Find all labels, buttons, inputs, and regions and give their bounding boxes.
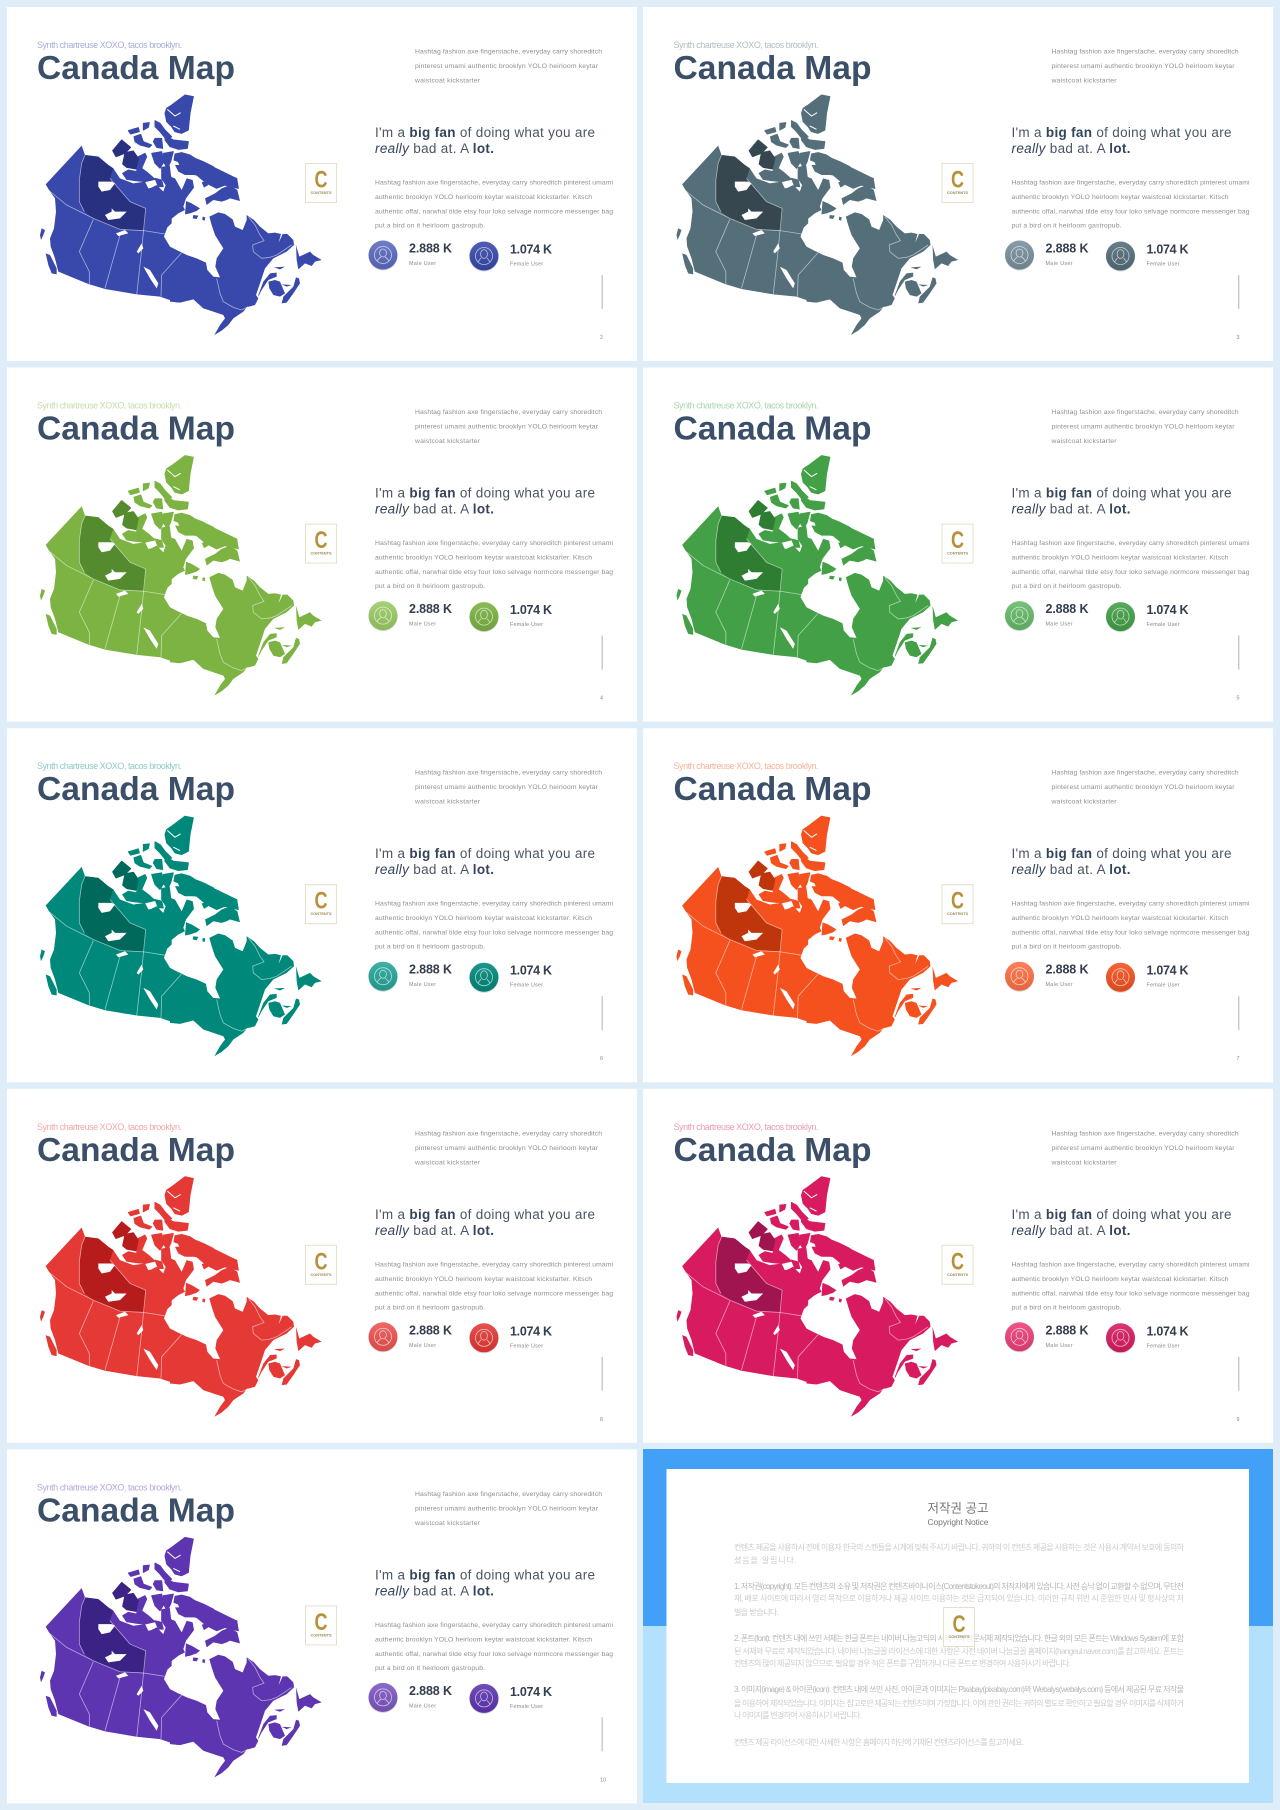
logo: CONTENTS (310, 191, 332, 195)
page number: 3 (1236, 335, 1240, 341)
panel: lime slide (7, 368, 637, 722)
icon: female user (1106, 963, 1135, 993)
page number: 10 (600, 1777, 606, 1783)
panel: pink slide (643, 1089, 1273, 1443)
body paragraph: Hashtag fashion axe fingerstache, everyday carry shoreditch pinterest umami (375, 901, 613, 908)
icon: male user (1005, 601, 1034, 631)
top paragraph: pinterest umami authentic brooklyn YOLO heirloom keytar (415, 424, 599, 431)
page number: 5 (1236, 696, 1240, 702)
heading (1012, 1207, 1232, 1238)
body paragraph: authentic brooklyn YOLO heirloom keytar waistcoat kickstarter. Kitsch (375, 555, 592, 562)
subtitle: Synth chartreuse XOXO, tacos brooklyn. (37, 401, 182, 411)
heading: really bad at. A lot. (375, 1223, 494, 1238)
notice body: 컨텐츠 제공을 사용하시 전에 이용자 한국의 스캔들을 시계에 맞춰 주시기 바랍니다. 귀하의 이 컨텐츠 제공을 사용하는 것은 사용시 계약서 보호에 동의하 (734, 1542, 1185, 1552)
body paragraph (375, 540, 613, 590)
heading: I'm a big fan of doing what you are (1012, 125, 1232, 140)
heading: really bad at. A lot. (1012, 1223, 1130, 1238)
body paragraph: put a bird on it heirloom gastropub. (375, 1665, 485, 1672)
stat: female users: 1.074 K (1146, 964, 1188, 978)
stat: female users (510, 1324, 552, 1349)
heading: really bad at. A lot. (375, 862, 494, 877)
logo: CONTENTS (947, 1273, 968, 1277)
stat: male users: Male User (1046, 1343, 1073, 1349)
top paragraph: waistcoat kickstarter (414, 1159, 481, 1166)
title: Canada Map (37, 1132, 235, 1169)
body paragraph: Hashtag fashion axe fingerstache, everyday carry shoreditch pinterest umami (1012, 1261, 1250, 1268)
notice body: 3. 이미지(image) & 아이콘(icon): 컨텐츠 내에 쓰인 사진, 아이콘과 이미지는 Pixabay(pixabay.com)와 Webalys(webalys.com) 등에서 제공된 무료 저작물 (734, 1684, 1184, 1694)
top paragraph: waistcoat kickstarter (414, 438, 481, 445)
body paragraph: put a bird on it heirloom gastropub. (1012, 1304, 1122, 1311)
top paragraph: Hashtag fashion axe fingerstache, everyday carry shoreditch (1052, 48, 1239, 56)
body paragraph: authentic offal, narwhal tilde etsy four loko selvage normcore messenger bag (375, 930, 613, 937)
subtitle: Synth chartreuse XOXO, tacos brooklyn. (37, 40, 182, 50)
logo (944, 1608, 974, 1646)
heading: I'm a big fan of doing what you are (1012, 486, 1232, 501)
subtitle: Synth chartreuse XOXO, tacos brooklyn. (674, 1122, 818, 1132)
body paragraph: authentic brooklyn YOLO heirloom keytar waistcoat kickstarter. Kitsch (375, 1276, 592, 1283)
body paragraph: Hashtag fashion axe fingerstache, everyday carry shoreditch pinterest umami (375, 1261, 613, 1268)
stat: male users: Male User (409, 622, 436, 628)
title: Canada Map (37, 771, 235, 808)
stat: male users: Male User (409, 261, 436, 267)
logo: C (314, 888, 328, 915)
stat: female users: Female User (1146, 262, 1180, 268)
vertical rule (602, 636, 603, 670)
stat: female users (510, 242, 552, 268)
body paragraph: put a bird on it heirloom gastropub. (375, 583, 485, 590)
logo (942, 885, 973, 924)
notice body: 벌을 받습니다. (734, 1607, 779, 1617)
vertical rule (602, 1357, 603, 1391)
stat: male users (1046, 1323, 1088, 1349)
body paragraph: Hashtag fashion axe fingerstache, everyday carry shoreditch pinterest umami (375, 1622, 613, 1629)
top paragraph: pinterest umami authentic brooklyn YOLO heirloom keytar (1052, 63, 1235, 70)
icon: female user (1106, 242, 1135, 272)
stat: female users: 1.074 K (510, 964, 552, 978)
icon: male user (1005, 962, 1034, 992)
subtitle: Synth chartreuse XOXO, tacos brooklyn. (674, 401, 818, 411)
stat: female users: 1.074 K (510, 1685, 552, 1699)
top paragraph: Hashtag fashion axe fingerstache, everyday carry shoreditch (415, 770, 602, 777)
heading: I'm a big fan of doing what you are (375, 1567, 595, 1582)
title: Canada Map (37, 1492, 235, 1529)
notice body: 나 이미지를 변경하여 사용하시기 바랍니다. (734, 1710, 862, 1720)
stat: female users (1146, 603, 1188, 628)
stat: female users: Female User (510, 262, 543, 268)
body paragraph: Hashtag fashion axe fingerstache, everyday carry shoreditch pinterest umami (375, 540, 613, 547)
map of Canada (40, 816, 322, 1056)
stat: male users (409, 963, 452, 988)
stat: female users: Female User (510, 1343, 543, 1349)
top paragraph (1050, 770, 1239, 806)
top paragraph: Hashtag fashion axe fingerstache, everyday carry shoreditch (415, 1491, 602, 1498)
stat: male users: 2.888 K (409, 963, 452, 977)
stat: female users: 1.074 K (510, 242, 552, 256)
top paragraph: Hashtag fashion axe fingerstache, everyday carry shoreditch (415, 1130, 602, 1137)
heading (1012, 486, 1232, 517)
panel: green slide (643, 368, 1273, 722)
logo (942, 524, 973, 563)
heading: I'm a big fan of doing what you are (375, 125, 595, 140)
notice body: 셨음을 알립니다. (734, 1555, 797, 1565)
stat: male users: Male User (1046, 982, 1073, 988)
heading (375, 1567, 595, 1598)
logo: C (951, 527, 964, 554)
stat: male users: 2.888 K (409, 242, 452, 256)
stat: male users (409, 1323, 452, 1349)
logo: C (951, 888, 964, 915)
stat: male users: 2.888 K (1046, 242, 1088, 256)
heading (1012, 125, 1232, 156)
body paragraph: put a bird on it heirloom gastropub. (375, 1304, 485, 1311)
panel: orange slide (643, 728, 1273, 1082)
body paragraph: authentic offal, narwhal tilde etsy four loko selvage normcore messenger bag (375, 1651, 613, 1658)
logo: C (314, 166, 328, 194)
body paragraph: Hashtag fashion axe fingerstache, everyday carry shoreditch pinterest umami (1012, 540, 1250, 547)
page number: 6 (600, 1056, 603, 1062)
top paragraph (1050, 409, 1239, 445)
panel: red slide (7, 1089, 637, 1443)
logo (306, 1245, 336, 1284)
stat: male users (409, 1684, 452, 1709)
icon: female user (470, 1323, 498, 1353)
vertical rule (1238, 636, 1239, 670)
top paragraph: Hashtag fashion axe fingerstache, everyday carry shoreditch (1052, 770, 1239, 777)
icon: female user (1106, 602, 1135, 632)
top paragraph: pinterest umami authentic brooklyn YOLO heirloom keytar (1052, 1145, 1235, 1152)
logo: C (314, 1248, 328, 1275)
map of Canada (40, 456, 322, 696)
logo: C (951, 166, 964, 194)
vertical rule (602, 996, 603, 1030)
vertical rule (1238, 1357, 1239, 1391)
logo (942, 164, 973, 202)
body paragraph: authentic brooklyn YOLO heirloom keytar waistcoat kickstarter. Kitsch (375, 1636, 592, 1643)
stat: male users: 2.888 K (1046, 602, 1088, 616)
stat: male users: 2.888 K (409, 1323, 452, 1337)
subtitle: Synth chartreuse XOXO, tacos brooklyn. (674, 761, 818, 771)
logo: C (952, 1611, 966, 1638)
top paragraph: pinterest umami authentic brooklyn YOLO heirloom keytar (415, 1505, 599, 1512)
top paragraph (414, 48, 602, 84)
stat: male users: 2.888 K (409, 602, 452, 616)
stat: male users: Male User (409, 982, 436, 988)
notice body (734, 1542, 1185, 1747)
body paragraph (375, 1261, 613, 1311)
top paragraph: Hashtag fashion axe fingerstache, everyday carry shoreditch (415, 409, 602, 416)
body paragraph (375, 1622, 613, 1672)
heading (375, 125, 595, 156)
heading: I'm a big fan of doing what you are (1012, 846, 1232, 861)
stat: female users (1146, 964, 1188, 989)
heading: I'm a big fan of doing what you are (375, 486, 595, 501)
notice body: 재, 배포 사이트에 따라서 영리 목적으로 이용하거나 제공 사이트 이용하는 것은 금지되어 있습니다. 이러한 규칙 위반 시 준엄한 민사 및 형사상의 처 (734, 1593, 1184, 1603)
notice body: 된 서체와 무료로 제작되었습니다. 네이버 나눔글꼴 라이선스에 대한 사항은 사전 네이버 나눔글꼴 홈페이지(hangeul.naver.com)를 참고하세요. 폰트는 (734, 1646, 1184, 1656)
vertical rule (1238, 996, 1239, 1030)
logo: CONTENTS (948, 1635, 970, 1639)
icon: male user (368, 962, 398, 992)
panel: copyright notice (643, 1449, 1273, 1803)
top paragraph (414, 1491, 602, 1527)
body paragraph: authentic offal, narwhal tilde etsy four loko selvage normcore messenger bag (375, 208, 613, 216)
stat: male users (1046, 602, 1088, 628)
top paragraph: waistcoat kickstarter (1050, 799, 1117, 806)
stat: female users: 1.074 K (510, 603, 552, 617)
body paragraph (1012, 1261, 1250, 1311)
body paragraph: put a bird on it heirloom gastropub. (1012, 222, 1122, 230)
panel: indigo slide (7, 7, 637, 361)
heading: really bad at. A lot. (1012, 502, 1130, 517)
logo: C (314, 1609, 328, 1636)
stat: female users (1146, 1324, 1188, 1349)
heading: I'm a big fan of doing what you are (375, 846, 595, 861)
top paragraph: pinterest umami authentic brooklyn YOLO heirloom keytar (415, 1145, 599, 1152)
heading (375, 486, 595, 517)
panel: teal slide (7, 728, 637, 1082)
icon: female user (1106, 1323, 1135, 1353)
body paragraph (1012, 540, 1250, 590)
body paragraph: put a bird on it heirloom gastropub. (375, 222, 485, 230)
subtitle: Synth chartreuse XOXO, tacos brooklyn. (37, 761, 182, 771)
icon: male user (368, 1322, 398, 1352)
map of Canada (676, 1177, 958, 1417)
subtitle: Synth chartreuse XOXO, tacos brooklyn. (37, 1122, 182, 1132)
logo: C (314, 527, 328, 554)
stat: male users: Male User (1046, 261, 1073, 267)
map of Canada (40, 1537, 322, 1777)
top paragraph (414, 770, 602, 806)
logo: CONTENTS (310, 1633, 332, 1637)
icon: female user (470, 1684, 498, 1714)
body paragraph: Hashtag fashion axe fingerstache, everyday carry shoreditch pinterest umami (375, 180, 613, 186)
stat: male users (1046, 963, 1088, 988)
body paragraph (375, 180, 613, 230)
stat: male users: 2.888 K (409, 1684, 452, 1698)
top paragraph: waistcoat kickstarter (414, 1520, 481, 1527)
subtitle: Synth chartreuse XOXO, tacos brooklyn. (674, 40, 818, 50)
body paragraph: authentic brooklyn YOLO heirloom keytar waistcoat kickstarter. Kitsch (1012, 555, 1229, 562)
title: Canada Map (674, 771, 872, 808)
top paragraph (1050, 1130, 1239, 1166)
title: Canada Map (674, 50, 872, 87)
top paragraph: Hashtag fashion axe fingerstache, everyday carry shoreditch (1052, 1130, 1239, 1137)
subtitle: Synth chartreuse XOXO, tacos brooklyn. (37, 1482, 182, 1492)
heading (375, 1207, 595, 1238)
notice body: 2. 폰트(font): 컨텐츠 내에 쓰인 서체는 한글 폰트는 네이버 나눔고딕의 서체이며 영문서체 제작되었습니다. 한글 외의 모든 폰트는 Windows System에 포함 (734, 1633, 1185, 1643)
stat: male users: Male User (409, 1703, 436, 1709)
logo (306, 164, 336, 202)
stat: female users: 1.074 K (510, 1324, 552, 1338)
top paragraph: waistcoat kickstarter (1050, 1159, 1117, 1166)
top paragraph: pinterest umami authentic brooklyn YOLO heirloom keytar (1052, 424, 1235, 431)
stat: female users (510, 603, 552, 628)
top paragraph: Hashtag fashion axe fingerstache, everyday carry shoreditch (1052, 409, 1239, 416)
logo: CONTENTS (947, 552, 968, 556)
heading: I'm a big fan of doing what you are (375, 1207, 595, 1222)
stat: male users: Male User (1046, 622, 1073, 628)
body paragraph: put a bird on it heirloom gastropub. (1012, 944, 1122, 951)
title: Canada Map (37, 50, 235, 87)
top paragraph (414, 1130, 602, 1166)
top paragraph (414, 409, 602, 445)
top paragraph: Hashtag fashion axe fingerstache, everyday carry shoreditch (415, 48, 602, 56)
body paragraph: authentic offal, narwhal tilde etsy four loko selvage normcore messenger bag (1012, 569, 1250, 576)
icon: male user (1005, 240, 1034, 270)
body paragraph: Hashtag fashion axe fingerstache, everyday carry shoreditch pinterest umami (1012, 901, 1250, 908)
map of Canada (40, 95, 322, 335)
map of Canada (676, 95, 958, 335)
body paragraph: put a bird on it heirloom gastropub. (375, 944, 485, 951)
stat: female users: 1.074 K (1146, 1324, 1188, 1338)
title: Canada Map (674, 1132, 872, 1169)
top paragraph (1050, 48, 1239, 84)
stat: female users: Female User (1146, 622, 1180, 628)
stat: female users: 1.074 K (1146, 603, 1188, 617)
stat: male users (409, 242, 452, 267)
body paragraph: Hashtag fashion axe fingerstache, everyday carry shoreditch pinterest umami (1012, 180, 1250, 186)
notice title: Copyright Notice (928, 1517, 989, 1527)
body paragraph (1012, 901, 1250, 951)
stat: female users: Female User (510, 983, 543, 989)
page number: 8 (600, 1417, 603, 1423)
body paragraph: authentic offal, narwhal tilde etsy four loko selvage normcore messenger bag (375, 569, 613, 576)
body paragraph: authentic offal, narwhal tilde etsy four loko selvage normcore messenger bag (375, 1290, 613, 1297)
top paragraph: pinterest umami authentic brooklyn YOLO heirloom keytar (415, 63, 599, 70)
map of Canada (40, 1177, 322, 1417)
body paragraph: authentic brooklyn YOLO heirloom keytar waistcoat kickstarter. Kitsch (1012, 194, 1229, 201)
vertical rule (602, 275, 603, 309)
icon: male user (368, 240, 398, 270)
logo: CONTENTS (310, 1273, 332, 1277)
heading (375, 846, 595, 877)
logo: C (951, 1248, 964, 1275)
top paragraph: pinterest umami authentic brooklyn YOLO heirloom keytar (415, 784, 599, 791)
stat: female users: Female User (1146, 983, 1180, 989)
notice body: 컨텐츠 제공 라이선스에 대한 사세한 사항은 홈페이지 하단에 기재된 컨텐츠라이선스를 참고하세요. (734, 1737, 1024, 1747)
title: Canada Map (674, 411, 872, 448)
body paragraph (375, 901, 613, 951)
heading: really bad at. A lot. (1012, 141, 1130, 156)
icon: female user (470, 242, 498, 272)
stat: male users: 2.888 K (1046, 963, 1088, 977)
body paragraph (1012, 180, 1250, 230)
top paragraph: waistcoat kickstarter (414, 799, 481, 806)
page number: 7 (1236, 1056, 1240, 1062)
body paragraph: authentic brooklyn YOLO heirloom keytar waistcoat kickstarter. Kitsch (1012, 1276, 1229, 1283)
notice body: 을 이용하여 제작되었습니다. 이미지는 참고로만 제공되는 컨텐츠이며 가정합니다. 이에 관한 권리는 귀하의 별도로 확인하고 필요할 경우 이미지를 삭제하거 (734, 1698, 1184, 1708)
panel: purple slide (7, 1449, 637, 1803)
stat: female users: Female User (510, 1704, 543, 1710)
stat: female users (510, 964, 552, 989)
stat: female users (1146, 242, 1188, 268)
logo: CONTENTS (947, 191, 968, 195)
icon: male user (368, 601, 398, 631)
map of Canada (676, 816, 958, 1056)
heading (1012, 846, 1232, 877)
vertical rule (1238, 275, 1239, 309)
stat: female users: Female User (510, 622, 543, 628)
body paragraph: authentic offal, narwhal tilde etsy four loko selvage normcore messenger bag (1012, 930, 1250, 937)
page number: 2 (600, 335, 603, 341)
icon: female user (470, 602, 498, 632)
heading: I'm a big fan of doing what you are (1012, 1207, 1232, 1222)
stat: male users: 2.888 K (1046, 1323, 1088, 1337)
logo: CONTENTS (947, 912, 968, 916)
logo (306, 524, 336, 563)
body paragraph: authentic brooklyn YOLO heirloom keytar waistcoat kickstarter. Kitsch (1012, 915, 1229, 922)
logo: CONTENTS (310, 912, 332, 916)
logo: CONTENTS (310, 552, 332, 556)
notice body: 1. 저작권(copyright): 모든 컨텐츠의 소유 및 저작권은 컨텐츠바이나이스(Contentstokeout)의 저작자에게 있습니다. 사전 승낙 없이 교환할 수 없으며, 무단전 (734, 1581, 1184, 1591)
stat: male users (1046, 242, 1088, 267)
top paragraph: waistcoat kickstarter (414, 78, 481, 84)
top paragraph: waistcoat kickstarter (1050, 438, 1117, 445)
heading: really bad at. A lot. (375, 1583, 494, 1598)
logo (306, 885, 336, 924)
vertical rule (602, 1717, 603, 1751)
page number: 9 (1236, 1417, 1240, 1423)
map of Canada (676, 456, 958, 696)
body paragraph: authentic offal, narwhal tilde etsy four loko selvage normcore messenger bag (1012, 208, 1250, 216)
stat: female users (510, 1685, 552, 1710)
stat: female users: Female User (1146, 1343, 1180, 1349)
stat: female users: 1.074 K (1146, 242, 1188, 256)
logo (306, 1606, 336, 1645)
heading: really bad at. A lot. (1012, 862, 1130, 877)
notice title (928, 1502, 989, 1527)
title: Canada Map (37, 411, 235, 448)
body paragraph: authentic brooklyn YOLO heirloom keytar waistcoat kickstarter. Kitsch (375, 915, 592, 922)
stat: male users (409, 602, 452, 628)
heading: really bad at. A lot. (375, 141, 494, 156)
body paragraph: authentic brooklyn YOLO heirloom keytar waistcoat kickstarter. Kitsch (375, 194, 592, 201)
page number: 4 (600, 696, 603, 702)
notice title: 저작권 공고 (928, 1502, 988, 1516)
logo (942, 1245, 973, 1284)
heading: really bad at. A lot. (375, 502, 494, 517)
stat: male users: Male User (409, 1343, 436, 1349)
body paragraph: authentic offal, narwhal tilde etsy four loko selvage normcore messenger bag (1012, 1290, 1250, 1297)
panel: slate slide (643, 7, 1273, 361)
top paragraph: pinterest umami authentic brooklyn YOLO heirloom keytar (1052, 784, 1235, 791)
notice body: 컨텐츠의 많이 제공되지 않으므로, 필요할 경우 적은 폰트를 구입하거나 다른 폰트로 변경하여 사용하시기 바랍니다. (734, 1658, 1071, 1668)
icon: male user (368, 1683, 398, 1713)
icon: female user (470, 963, 498, 993)
body paragraph: put a bird on it heirloom gastropub. (1012, 583, 1122, 590)
top paragraph: waistcoat kickstarter (1050, 78, 1117, 84)
icon: male user (1005, 1322, 1034, 1352)
